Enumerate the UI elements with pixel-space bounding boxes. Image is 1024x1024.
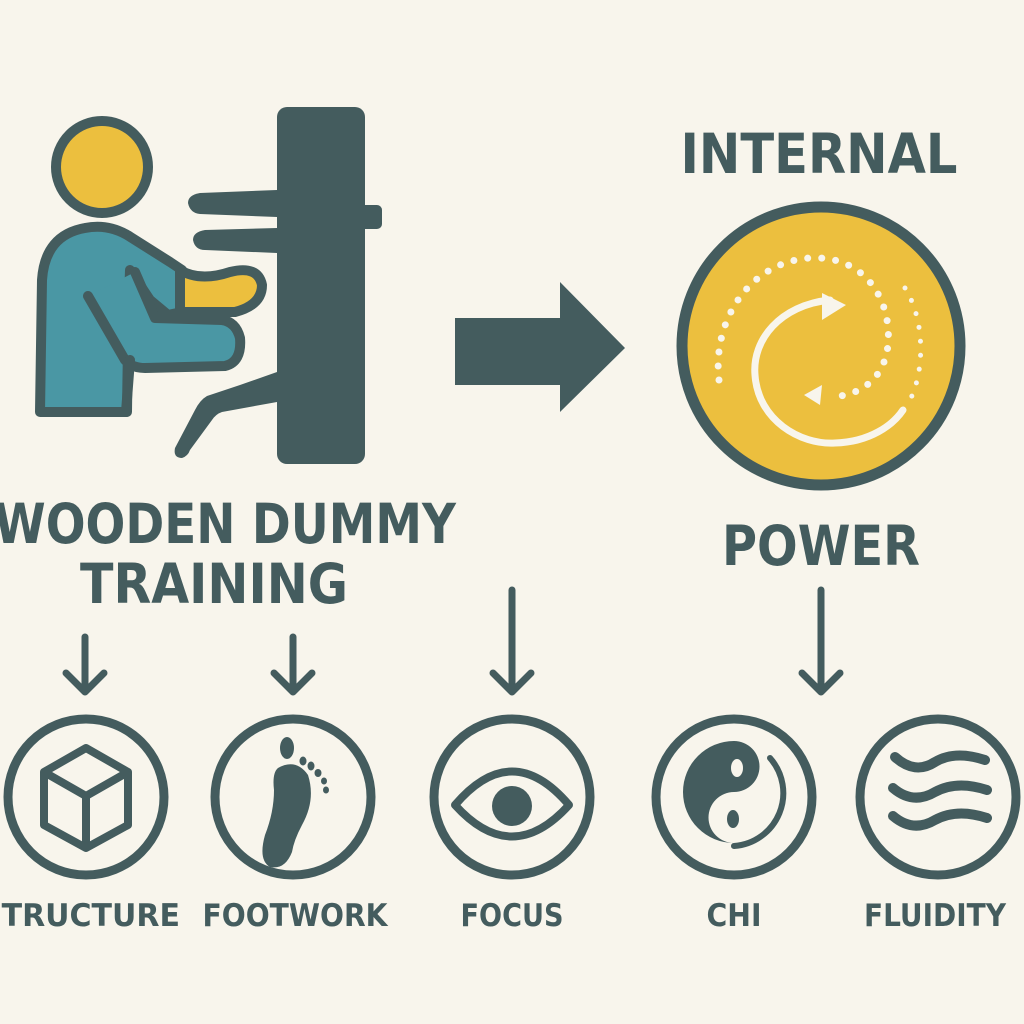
title: wooden dummy training: TRAINING: [80, 552, 348, 616]
labels: FOOTWORK: [202, 898, 388, 934]
labels: FOCUS: [460, 898, 564, 934]
icon: footwork foot: [215, 719, 371, 875]
labels: [0, 898, 1006, 934]
labels: CHI: [706, 898, 762, 934]
illustration: person at wooden dummy: [40, 107, 382, 464]
title: wooden dummy training: WOODEN DUMMY: [0, 492, 457, 556]
icon: fluidity waves: [860, 719, 1016, 875]
title: power: POWER: [722, 514, 920, 578]
arrows: down: [66, 590, 840, 692]
title: wooden dummy training: [0, 492, 457, 616]
title: internal: INTERNAL: [680, 122, 958, 186]
person: [40, 121, 262, 412]
icon: structure cube: [8, 719, 164, 875]
labels: FLUIDITY: [864, 898, 1006, 934]
icon: internal power circle: [682, 207, 960, 485]
arrow: main right: [455, 282, 625, 412]
icon: focus eye: [434, 719, 590, 875]
icon: chi yin yang: [656, 719, 812, 875]
wooden dummy: [175, 107, 382, 464]
